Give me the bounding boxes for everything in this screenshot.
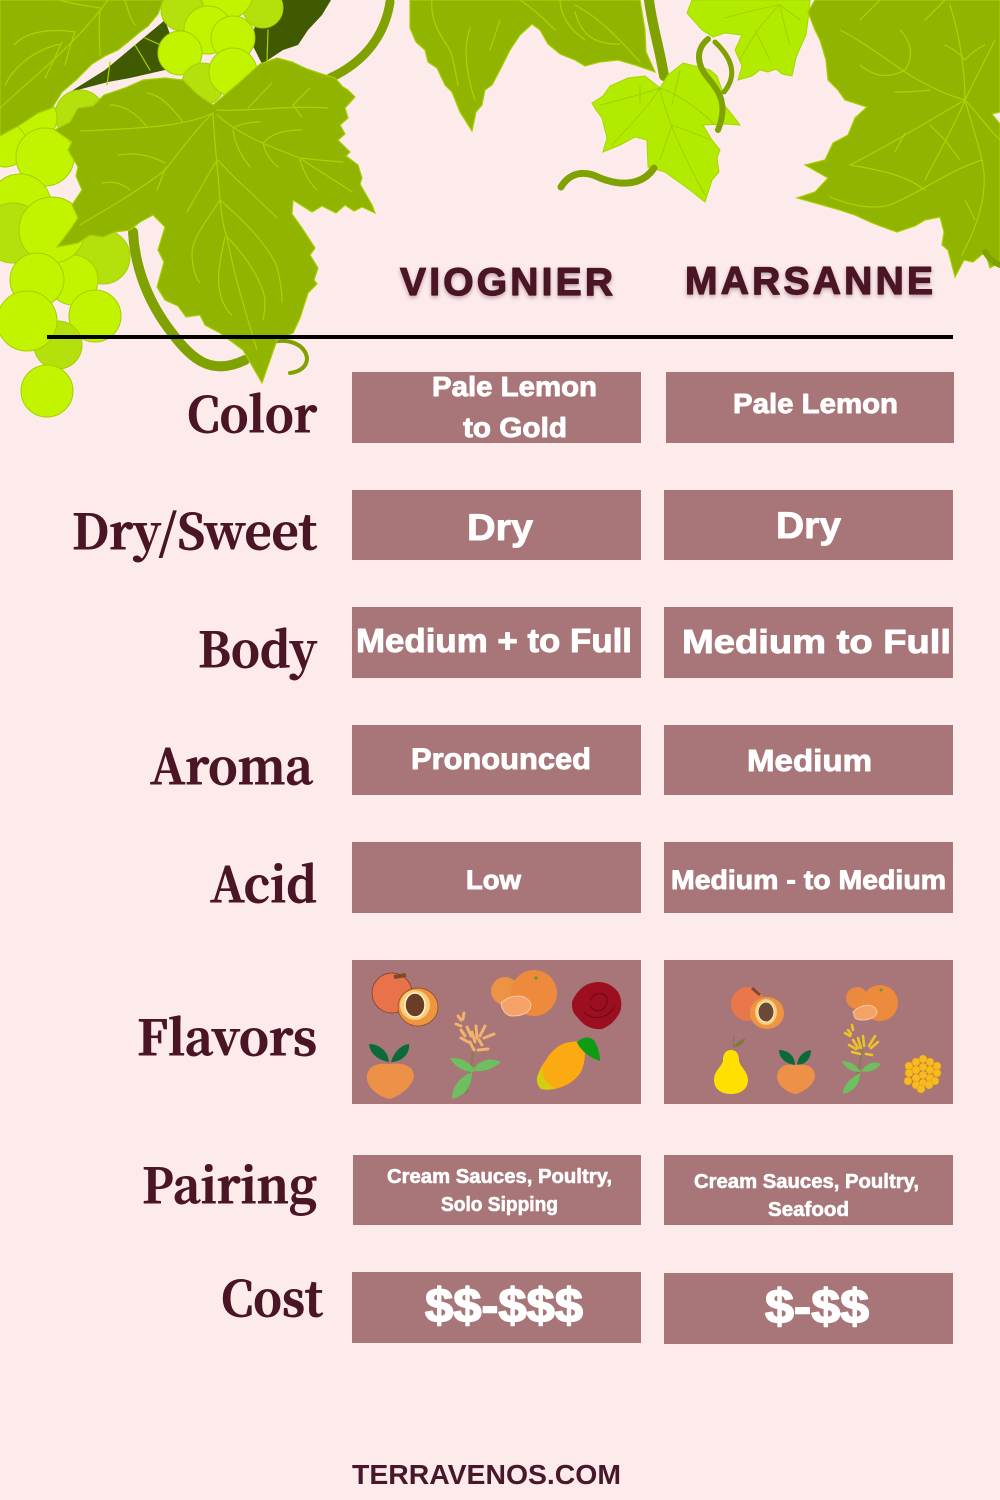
row: Pairing [142, 1148, 953, 1225]
footer: website: TERRAVENOS.COM [352, 1459, 621, 1490]
Viognier cost value: $$-$$$ [425, 1280, 583, 1333]
icon: honeycomb [904, 1055, 941, 1093]
Marsanne body value: Medium to Full [682, 623, 951, 660]
Marsanne aroma value: Medium [747, 743, 872, 778]
label: Flavors: Flavors [137, 1000, 317, 1069]
label: Dry/Sweet: Dry/Sweet [72, 494, 317, 563]
row: Body [198, 607, 953, 681]
right edge stem [985, 252, 1000, 265]
stem and tendril under main leaf [133, 2, 390, 373]
illustration: grape vine and leaves [0, 0, 1000, 417]
Viognier body value: Medium + to Full [356, 622, 632, 659]
right big leaf [797, 0, 1000, 277]
row: Acid [210, 842, 953, 916]
vine stem top centre [649, 0, 664, 76]
twisted tendril [699, 39, 732, 130]
Viognier body value [352, 607, 641, 678]
icon: tangerines [846, 985, 898, 1021]
label: Cost: Cost [221, 1261, 323, 1330]
Marsanne color value [666, 372, 954, 443]
label: Color: Color [187, 377, 317, 446]
Viognier flavors panel [352, 960, 641, 1104]
Marsanne color value: Pale Lemon [733, 388, 898, 419]
Marsanne cost value [664, 1273, 953, 1344]
icon: apricot [372, 973, 438, 1026]
Viognier color value [352, 371, 641, 443]
icon: peach [367, 1044, 414, 1099]
grape cluster [0, 0, 283, 417]
Viognier dry/sweet value [352, 490, 641, 560]
Marsanne acid value: Medium - to Medium [671, 865, 946, 895]
icon: herb sprig [842, 1025, 881, 1094]
icon: peach [777, 1050, 815, 1094]
label: Acid: Acid [210, 847, 317, 916]
Marsanne pairing value: Cream Sauces, Poultry, [694, 1171, 919, 1193]
bright centre small leaf [592, 63, 740, 202]
row: Cost [221, 1261, 953, 1344]
Viognier aroma value: Pronounced [411, 743, 591, 776]
Viognier pairing value [353, 1155, 641, 1225]
Marsanne flavors panel [664, 960, 953, 1104]
Marsanne dry/sweet value [664, 490, 953, 560]
tendril below small leaf [561, 168, 654, 187]
column heading: Marsanne: MARSANNE [685, 260, 933, 303]
column heading: Viognier: VIOGNIER [400, 261, 613, 304]
label: Body: Body [198, 612, 317, 681]
Marsanne body value [664, 607, 953, 678]
label: Pairing: Pairing [142, 1148, 317, 1217]
Viognier aroma value [352, 725, 641, 795]
icon: mango [537, 1037, 600, 1090]
Viognier acid value [352, 842, 641, 913]
Viognier acid value: Low [466, 865, 522, 895]
main grape leaf [55, 58, 375, 383]
icon: rose [572, 982, 621, 1029]
icon: pear [714, 1035, 748, 1094]
upper-left leaf [0, 0, 163, 136]
row: Flavors [137, 960, 953, 1104]
bright top-right small leaf [687, 0, 810, 80]
row: Dry/Sweet [72, 490, 953, 563]
Marsanne cost value: $-$$ [765, 1281, 869, 1334]
top centre leaf [410, 0, 655, 131]
Viognier dry/sweet value: Dry [467, 507, 533, 548]
dark background leaf [70, 0, 331, 92]
Marsanne acid value [664, 842, 953, 913]
Viognier pairing value: Solo Sipping [441, 1194, 558, 1216]
Viognier cost value [352, 1272, 641, 1343]
Viognier color value: Pale Lemon [432, 371, 597, 402]
Marsanne aroma value [664, 725, 953, 795]
Viognier pairing value: Cream Sauces, Poultry, [387, 1166, 612, 1188]
icon: herb sprig [450, 1013, 501, 1099]
label: Aroma: Aroma [150, 729, 313, 798]
icon: apricot [731, 987, 784, 1029]
Viognier color value: to Gold [463, 412, 567, 443]
row: Color [187, 371, 954, 446]
icon: tangerines [491, 970, 557, 1016]
Marsanne pairing value: Seafood [768, 1199, 849, 1221]
Marsanne dry/sweet value: Dry [776, 505, 841, 546]
Marsanne pairing value [664, 1155, 953, 1225]
row: Aroma [150, 725, 953, 798]
